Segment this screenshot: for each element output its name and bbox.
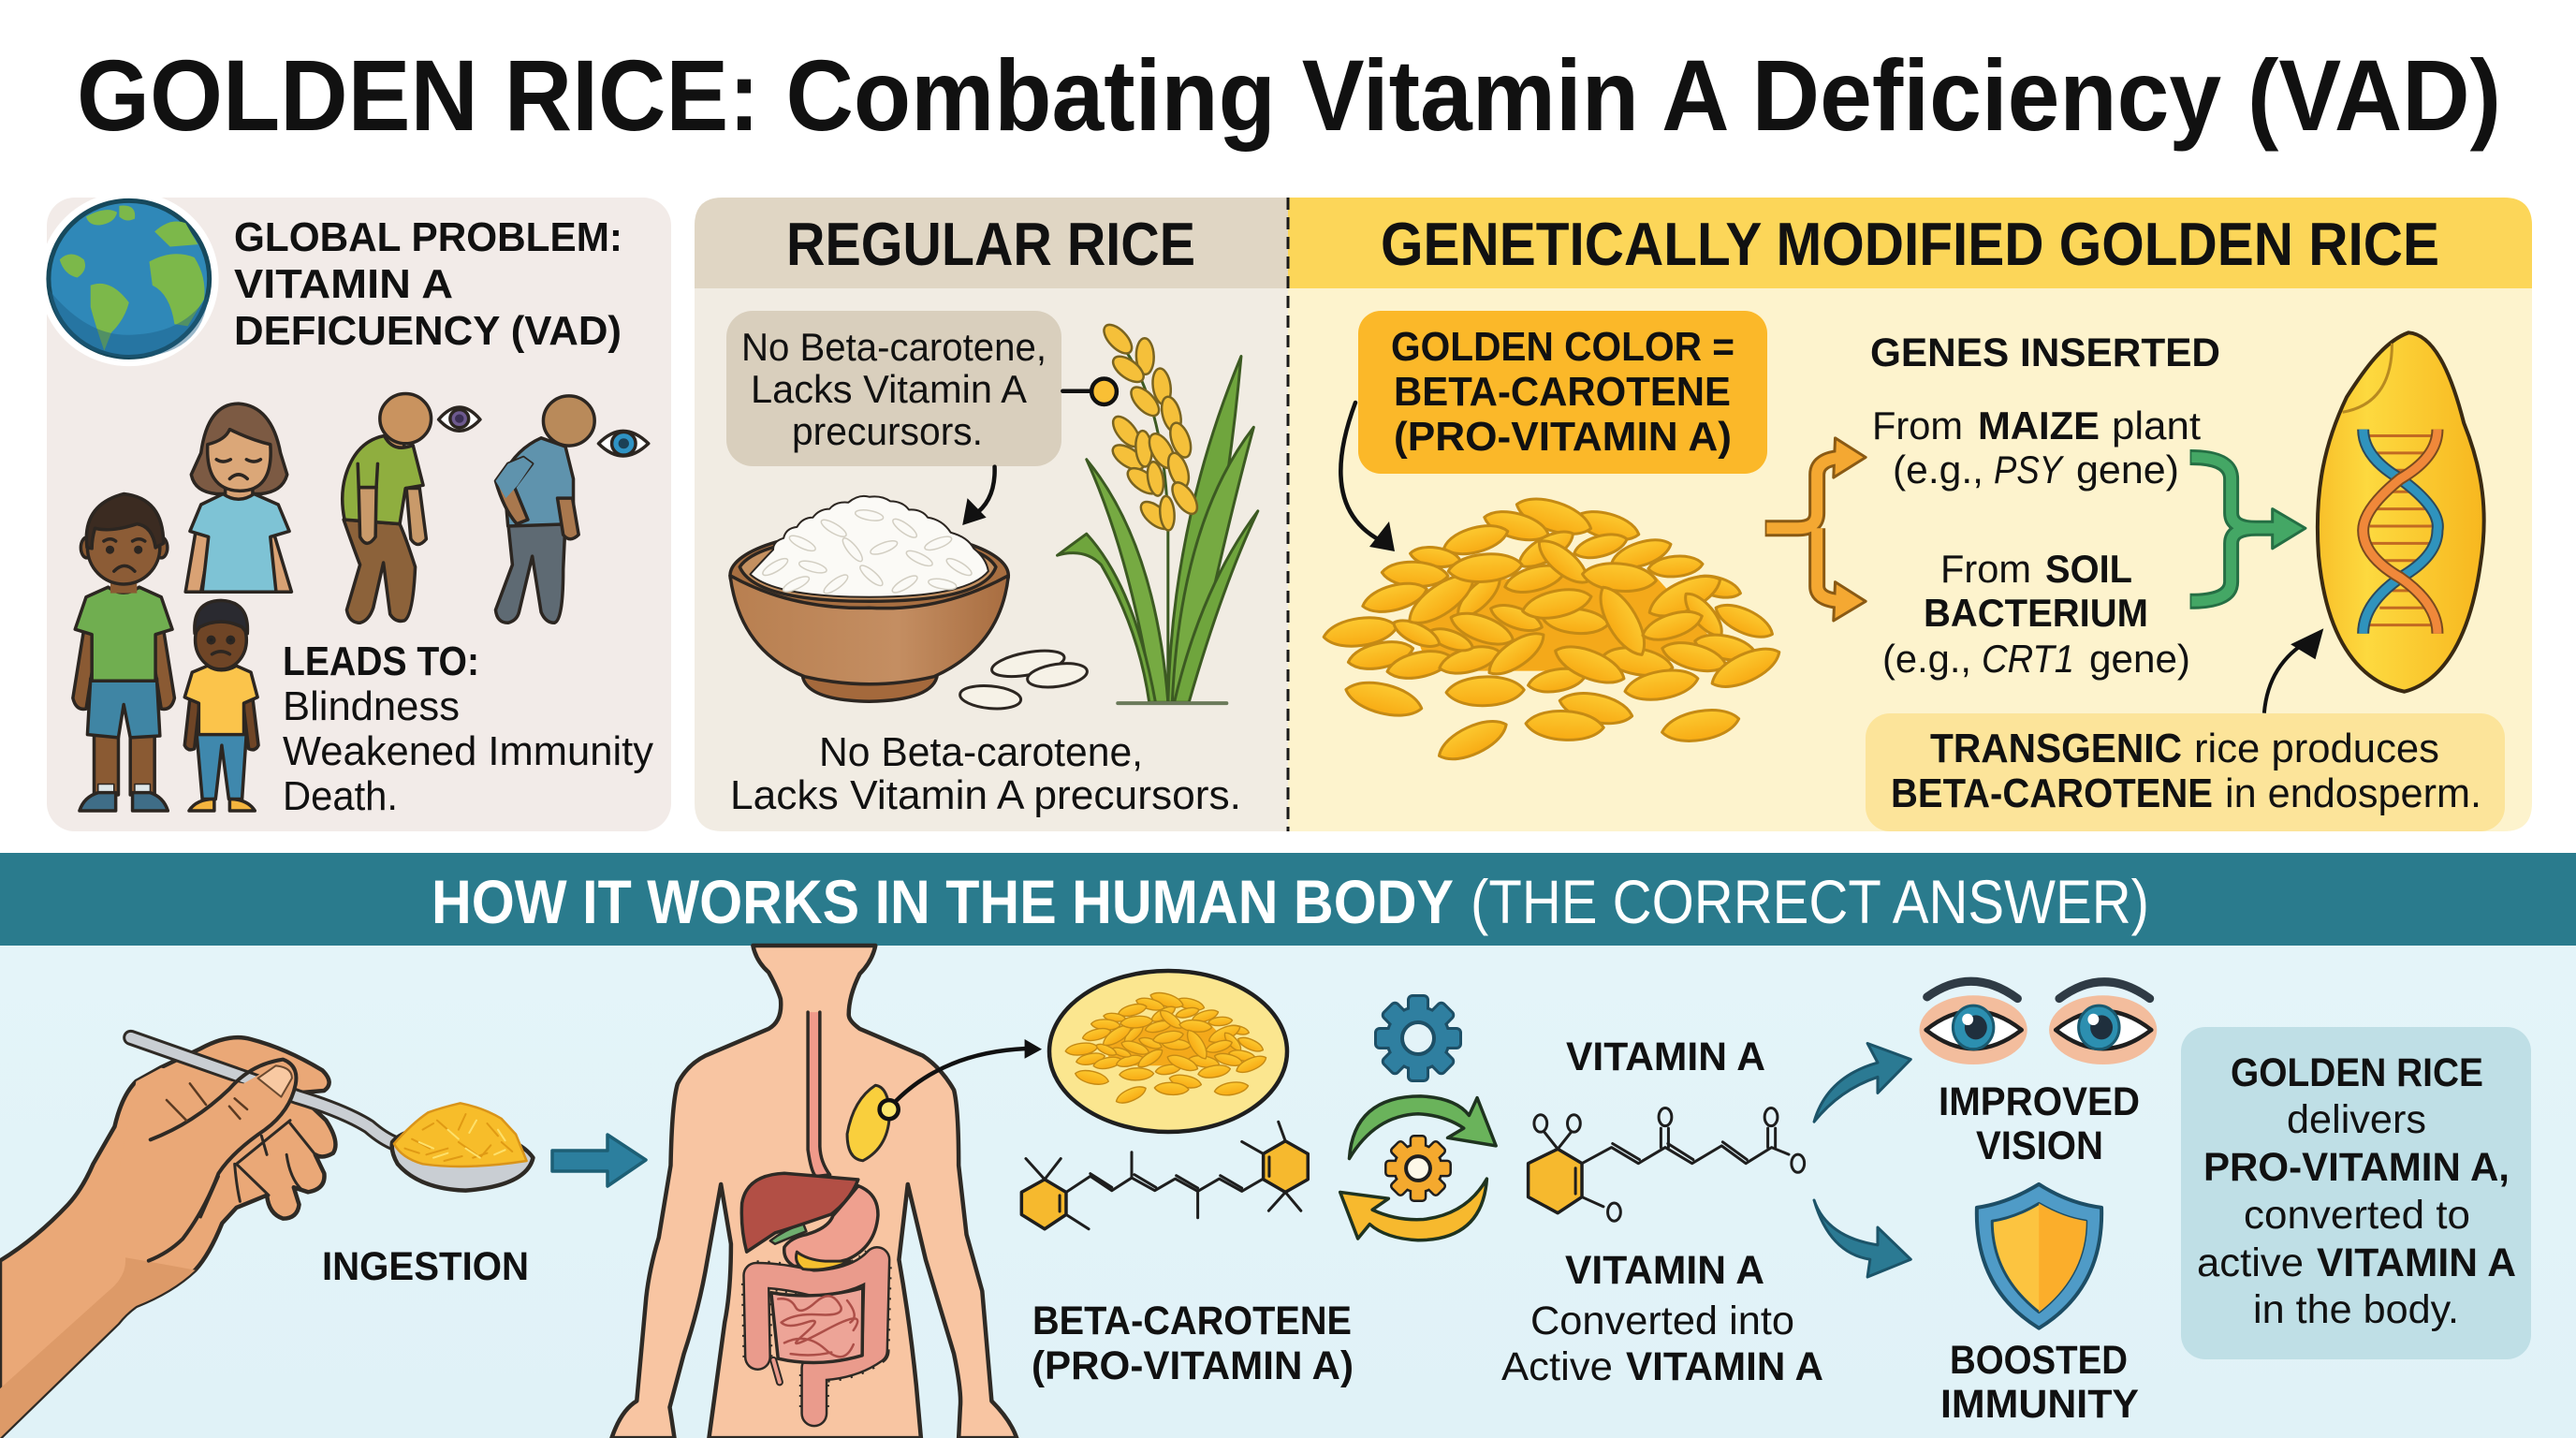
arrow: orange branch: [1765, 438, 1866, 621]
text: leads to: LEADS TO:: [283, 638, 479, 684]
icon: orange gear: [1387, 1137, 1449, 1199]
label: boosted immunity: [1940, 1338, 2139, 1427]
arrow: grain to zoomed rice: [880, 1039, 1042, 1119]
icon: rice plant: [1058, 320, 1258, 703]
panel: golden rice: [1288, 198, 2532, 831]
label: beta-carotene: BETA-CAROTENE: [1032, 1299, 1352, 1343]
text: regular rice caption: Lacks Vitamin A precursors.: [730, 772, 1241, 818]
text: regular rice caption: No Beta-carotene,: [819, 729, 1143, 775]
arrows: conversion cycle: [1340, 1096, 1496, 1240]
text: leads to: Blindness: [283, 683, 460, 729]
arrow: golden color to pile: [1340, 403, 1395, 551]
label: vitamin A conversion: VITAMIN A: [1565, 1248, 1764, 1293]
illustration: affected people: [73, 394, 649, 811]
callout: summary: GOLDEN RICE: [2231, 1050, 2483, 1095]
icon: left eye: [1920, 981, 2027, 1064]
text: soil bacterium gene: gene): [2089, 637, 2190, 681]
label: vitamin A conversion: Active: [1501, 1344, 1613, 1389]
stomach: [784, 1186, 878, 1267]
banner: how it works: HOW IT WORKS IN THE HUMAN BODY: [432, 867, 1454, 936]
adult with olive shirt: [343, 394, 432, 623]
icon: blue gear: [1377, 997, 1459, 1079]
icon: shield: [1977, 1184, 2101, 1328]
molecule: beta-carotene: [1021, 1122, 1308, 1229]
small child: [184, 600, 258, 811]
right column outcomes: [1814, 981, 2157, 1328]
callout: golden color: BETA-CAROTENE: [1394, 369, 1731, 415]
callout: transgenic rice: BETA-CAROTENE: [1891, 770, 2213, 816]
label: ingestion: INGESTION: [322, 1244, 529, 1289]
label: vitamin A conversion: Converted into: [1530, 1299, 1794, 1343]
large intestine: [756, 1260, 877, 1414]
text: soil bacterium gene: CRT1: [1982, 637, 2074, 681]
text: maize gene: (e.g.,: [1893, 448, 1983, 492]
callout: summary: PRO-VITAMIN A,: [2203, 1145, 2510, 1190]
icon: golden grain with DNA: [2318, 332, 2484, 692]
panel background: [695, 198, 1288, 831]
callout: transgenic rice: rice produces: [2194, 726, 2439, 771]
icon: rice bowl: [730, 496, 1008, 701]
text: soil bacterium gene: BACTERIUM: [1924, 591, 2148, 635]
icon: purple eye: [439, 407, 480, 431]
molecule: vitamin A: [1529, 1108, 1805, 1221]
icon: globe: [39, 192, 219, 366]
panel: global problem: [39, 192, 671, 831]
panel: regular rice: [695, 198, 1288, 831]
label: vitamin A conversion: VITAMIN A: [1626, 1344, 1823, 1389]
heading: genes inserted: GENES INSERTED: [1870, 330, 2220, 375]
text: leads to: Weakened Immunity: [283, 728, 653, 774]
illustration: hand with spoon: [0, 1037, 533, 1438]
callout: summary: [2181, 1027, 2531, 1359]
body outline: [611, 946, 1017, 1438]
label: vitamin A conversion: [1501, 1248, 1823, 1389]
panel background: [1288, 198, 2532, 831]
rice grain in body: [847, 1085, 889, 1161]
callout: no beta-carotene: precursors.: [792, 409, 983, 453]
illustration: human body: [611, 946, 1042, 1438]
arrow: to vision: [1814, 1044, 1910, 1122]
icon: golden rice pile: [1322, 491, 1785, 769]
banner: how it works: [0, 853, 2576, 946]
callout: transgenic rice: TRANSGENIC: [1930, 726, 2182, 771]
gallbladder: [770, 1224, 806, 1244]
label: vitamin A top: VITAMIN A: [1566, 1034, 1765, 1079]
text: maize gene: PSY: [1994, 448, 2065, 492]
liver: [741, 1173, 858, 1252]
label: boosted immunity: IMMUNITY: [1940, 1382, 2139, 1427]
text: soil bacterium gene: (e.g.,: [1882, 637, 1971, 681]
text: maize gene: [1872, 404, 2201, 492]
heading: global problem: VITAMIN A: [234, 261, 453, 307]
label: improved vision: [1939, 1079, 2140, 1168]
text: soil bacterium gene: SOIL: [2045, 547, 2132, 591]
callout: transgenic rice: [1866, 713, 2505, 831]
label: beta-carotene: (PRO-VITAMIN A): [1032, 1343, 1354, 1388]
divider: dashed line between rice types: [1286, 198, 1290, 831]
text: leads to: [283, 638, 653, 819]
boy: [73, 494, 174, 811]
label: boosted immunity: BOOSTED: [1950, 1338, 2128, 1383]
girl: [185, 404, 291, 592]
heading: global problem: DEFICUENCY (VAD): [234, 308, 622, 354]
heading: regular rice: REGULAR RICE: [786, 210, 1195, 278]
label: beta-carotene: [1032, 1299, 1354, 1388]
callout: summary: converted to: [2244, 1193, 2470, 1238]
heading: global problem: GLOBAL PROBLEM:: [234, 214, 622, 260]
arrow: transgenic to grain: [2264, 628, 2323, 713]
callout: summary: in the body.: [2253, 1287, 2459, 1332]
esophagus: [808, 1012, 830, 1177]
arrow: green branch: [2190, 457, 2305, 601]
text: maize gene: From: [1872, 404, 1963, 448]
adult with blue shirt: [495, 396, 594, 623]
text: soil bacterium gene: From: [1940, 547, 2031, 591]
connector dot: [1062, 378, 1117, 404]
text: maize gene: MAIZE: [1978, 404, 2100, 448]
callout: no beta-carotene: [726, 311, 1061, 466]
diagram arrows and grain: [1765, 332, 2484, 713]
panel background: [47, 198, 671, 831]
icon: loose rice grains: [959, 646, 1089, 712]
label: improved vision: IMPROVED: [1939, 1079, 2140, 1124]
callout: summary: VITAMIN A: [2317, 1240, 2516, 1285]
icon: rice close-up circle: [1049, 971, 1287, 1132]
header bar: [695, 198, 1288, 288]
arrow: callout to bowl: [962, 467, 995, 525]
callout: golden color: GOLDEN COLOR =: [1391, 324, 1734, 370]
callout: no beta-carotene: No Beta-carotene,: [741, 325, 1046, 369]
arrow: ingestion to body: [552, 1135, 646, 1186]
icon: right eye: [2049, 982, 2157, 1064]
text: maize gene: gene): [2076, 448, 2179, 492]
label: improved vision: VISION: [1976, 1123, 2103, 1168]
header bar: [1288, 198, 2532, 288]
callout: golden color: [1358, 311, 1767, 474]
text: regular rice caption: [730, 729, 1241, 818]
callout: golden color: (PRO-VITAMIN A): [1394, 414, 1732, 460]
callout: summary: delivers: [2287, 1097, 2426, 1142]
heading: golden rice: GENETICALLY MODIFIED GOLDEN RICE: [1381, 210, 2439, 278]
arrow: to immunity: [1814, 1200, 1910, 1277]
pancreas: [797, 1252, 850, 1269]
text: leads to: Death.: [283, 773, 398, 819]
callout: summary: active: [2197, 1240, 2304, 1285]
small intestine: [771, 1288, 863, 1362]
text: maize gene: plant: [2112, 404, 2201, 448]
callout: transgenic rice: in endosperm.: [2225, 770, 2481, 816]
callout: no beta-carotene: Lacks Vitamin A: [751, 367, 1027, 411]
text: soil bacterium gene: [1882, 547, 2190, 681]
illustration group: [730, 320, 1258, 712]
heading: global problem: [234, 214, 622, 354]
lower section background: [0, 936, 2576, 1438]
icon: blue eye: [598, 431, 649, 456]
banner: how it works: (THE CORRECT ANSWER): [1471, 867, 2149, 936]
